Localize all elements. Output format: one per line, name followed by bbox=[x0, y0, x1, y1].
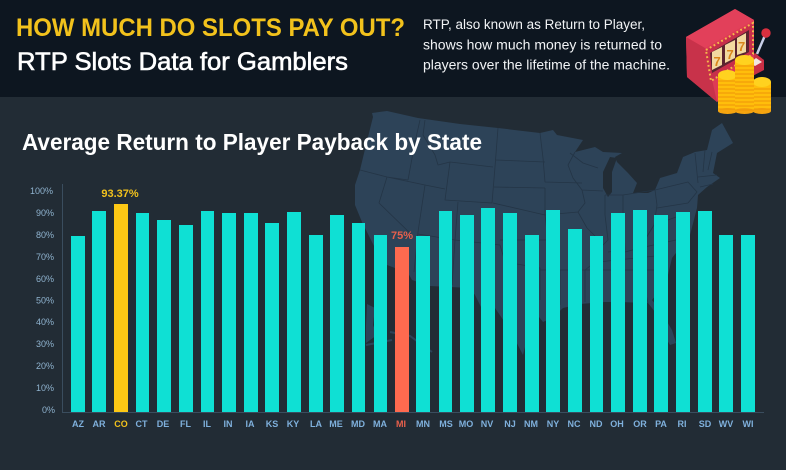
y axis labels: 0% bbox=[42, 405, 55, 415]
coins bbox=[718, 55, 771, 114]
y axis labels: 70% bbox=[36, 252, 54, 262]
x axis state labels bbox=[72, 419, 754, 429]
icon: slot machine with coins: 7 bbox=[726, 47, 734, 62]
subtitle: RTP Slots Data for Gamblers bbox=[17, 48, 348, 76]
lever bbox=[757, 33, 766, 54]
chart heading: Average Return to Player Payback by State bbox=[22, 129, 482, 155]
description text: RTP, also known as Return to Player, bbox=[423, 17, 645, 32]
description text: players over the lifetime of the machine. bbox=[423, 58, 670, 72]
bar chart: payback by state bbox=[71, 204, 755, 412]
title: How much do slots pay out: HOW MUCH DO SLOTS PAY OUT? bbox=[16, 14, 405, 42]
x axis state labels: WI bbox=[742, 419, 754, 429]
x axis state labels: MI bbox=[396, 419, 406, 429]
x axis state labels: NC bbox=[568, 419, 581, 429]
icon: slot machine with coins bbox=[686, 9, 771, 114]
x axis state labels: MD bbox=[351, 419, 365, 429]
x axis state labels: LA bbox=[310, 419, 322, 429]
icon: slot machine with coins: 7 bbox=[738, 39, 745, 54]
y axis labels: 80% bbox=[36, 230, 54, 240]
map: Lake Michigan bbox=[603, 157, 617, 197]
x axis state labels: DE bbox=[157, 419, 169, 429]
y axis labels bbox=[30, 186, 55, 415]
x axis state labels: AZ bbox=[72, 419, 84, 429]
value label: Colorado: 93.37% bbox=[101, 188, 139, 200]
x axis state labels: NV bbox=[481, 419, 493, 429]
description text bbox=[423, 17, 670, 72]
x axis state labels: AR bbox=[92, 419, 106, 429]
x axis state labels: MA bbox=[373, 419, 387, 429]
x axis state labels: CO bbox=[114, 419, 128, 429]
x axis state labels: IN bbox=[224, 419, 232, 429]
x axis state labels: ME bbox=[329, 419, 343, 429]
x axis state labels: OH bbox=[610, 419, 624, 429]
x axis state labels: IA bbox=[246, 419, 255, 429]
y axis labels: 60% bbox=[36, 274, 54, 284]
map: state borders bbox=[360, 120, 717, 305]
x axis state labels: MS bbox=[439, 419, 453, 429]
cabinet bbox=[686, 9, 754, 102]
chart axes bbox=[62, 184, 764, 412]
description text: shows how much money is returned to bbox=[423, 38, 662, 52]
y axis labels: 30% bbox=[36, 339, 54, 349]
x axis state labels: NY bbox=[547, 419, 559, 429]
x axis state labels: ND bbox=[590, 419, 603, 429]
y axis labels: 10% bbox=[36, 383, 54, 393]
map: Alaska panhandle fragment bbox=[366, 332, 432, 352]
map: Alaska fragment bbox=[366, 304, 377, 343]
x axis state labels: NJ bbox=[504, 419, 516, 429]
y axis labels: 40% bbox=[36, 317, 54, 327]
x axis state labels: FL bbox=[180, 419, 191, 429]
x axis state labels: SD bbox=[699, 419, 712, 429]
y axis labels: 20% bbox=[36, 361, 54, 371]
x axis state labels: MN bbox=[416, 419, 430, 429]
reel window bbox=[706, 23, 753, 81]
x axis state labels: KS bbox=[266, 419, 278, 429]
x axis state labels: WV bbox=[719, 419, 733, 429]
y axis labels: 90% bbox=[36, 208, 54, 218]
x axis state labels: MO bbox=[459, 419, 473, 429]
value label: Michigan: 75% bbox=[391, 230, 413, 242]
map: United States silhouette bbox=[355, 111, 733, 355]
y axis labels: 100% bbox=[30, 186, 53, 196]
x axis state labels: OR bbox=[633, 419, 647, 429]
header band bbox=[0, 0, 786, 97]
icon: slot machine with coins: 7 bbox=[714, 54, 721, 69]
x axis state labels: RI bbox=[678, 419, 686, 429]
y axis labels: 50% bbox=[36, 296, 54, 306]
x axis state labels: PA bbox=[655, 419, 667, 429]
x axis state labels: KY bbox=[287, 419, 299, 429]
x axis state labels: NM bbox=[524, 419, 538, 429]
x axis state labels: CT bbox=[136, 419, 148, 429]
x axis state labels: IL bbox=[203, 419, 212, 429]
